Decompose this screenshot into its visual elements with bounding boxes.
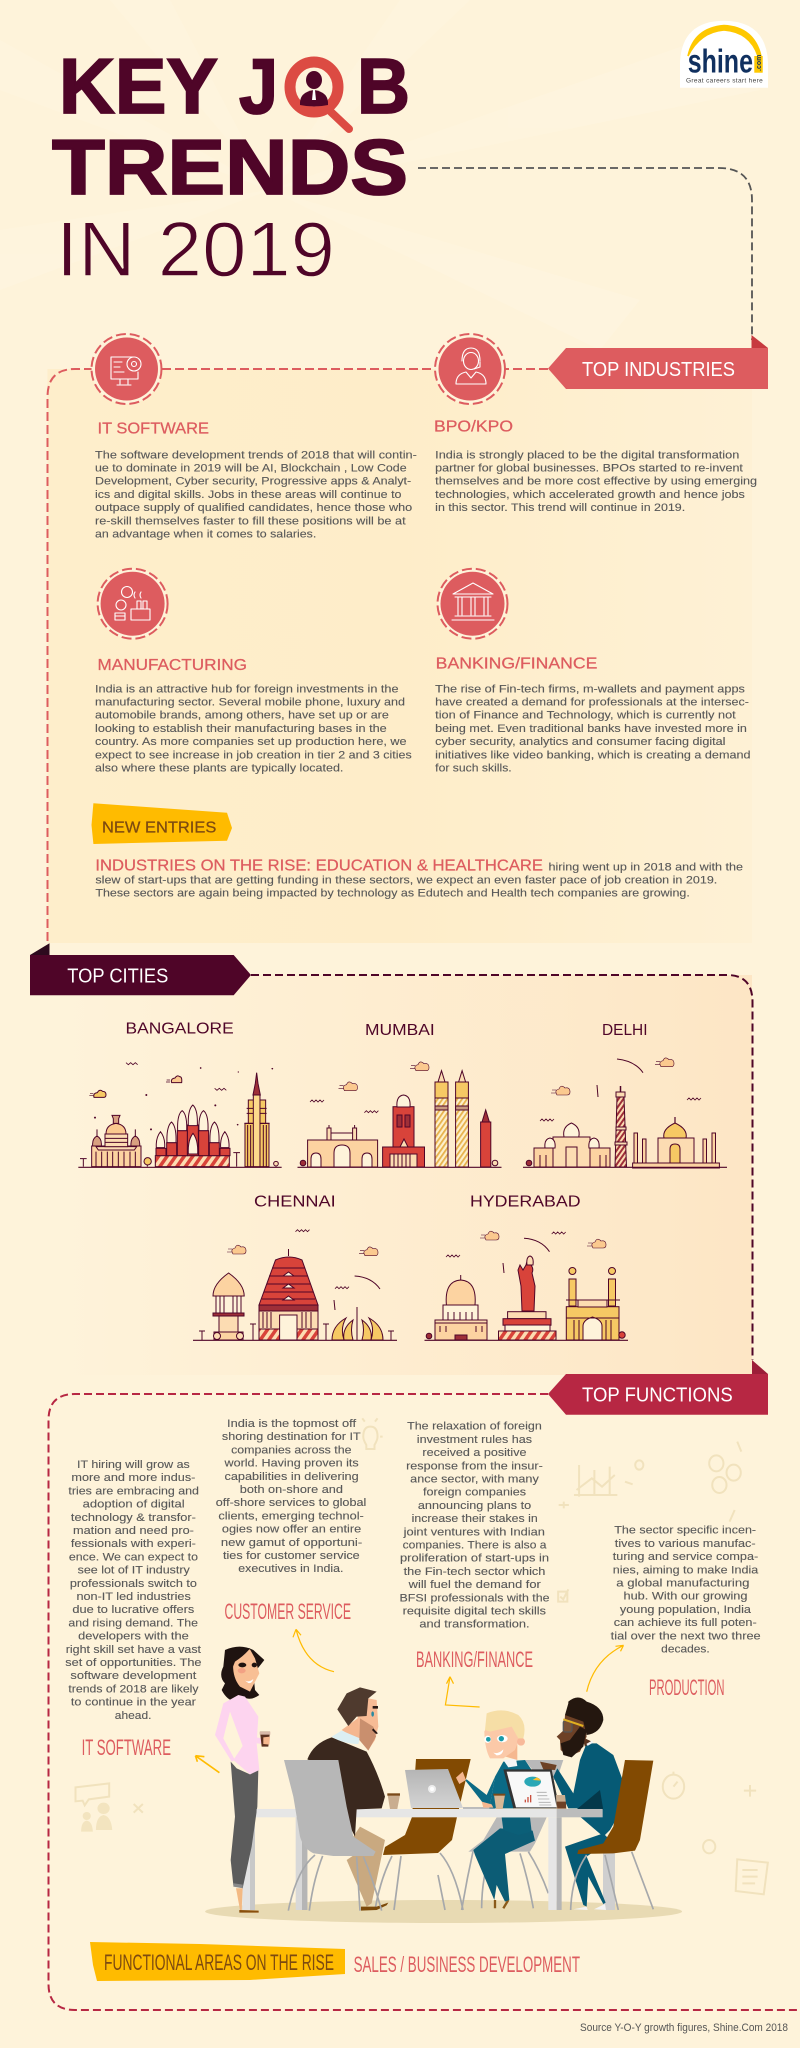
connector: crimson dashed frame (48, 1394, 800, 2010)
city: Hyderabad (424, 1194, 628, 1340)
skyline: Bangalore (78, 1063, 282, 1167)
column: IT software (65, 1459, 219, 1773)
silver laptop (405, 1769, 495, 1809)
text: IT software function: IT hiring will grow as (77, 1459, 190, 1471)
text: IT software body: outpace supply of qualified candidates, hence those who (95, 502, 412, 514)
text: banking function: companies. There is also a (403, 1540, 546, 1552)
text: new entries body: hiring went up in 2018 and with the (548, 861, 743, 873)
chair: grey front (284, 1760, 382, 1911)
text: banking function: and transformation. (419, 1619, 530, 1631)
connector: title to top industries (418, 168, 752, 340)
text: customer service function: both on-shore and (240, 1484, 343, 1496)
logo: shine.com: Great careers start here (686, 78, 763, 85)
text: customer service function: clients, emerging technol- (218, 1510, 364, 1522)
person: man seated (307, 1687, 388, 1911)
icon: banking (438, 569, 508, 639)
text: banking function: foreign companies (423, 1487, 527, 1499)
label: production: PRODUCTION (649, 1675, 724, 1700)
table top (256, 1809, 603, 1910)
city: Mumbai (298, 1022, 502, 1167)
text: IT software function: ence. We can expect to (69, 1551, 198, 1563)
text: banking body: tion of Finance and Technology, which is currently not (435, 710, 736, 722)
label: IT software: IT SOFTWARE (82, 1735, 171, 1760)
text: IT software body: re-skill themselves faster to fill these positions will be at (95, 515, 406, 527)
city: Chennai (193, 1194, 397, 1340)
person: woman standing (215, 1647, 270, 1913)
table left section (257, 1809, 297, 1817)
rear table legs (242, 1810, 615, 1910)
text: IT software body: Development, Cyber security, Progressive apps & Analyt- (95, 476, 412, 488)
block: IT software (95, 420, 417, 540)
text: IT software function: non-IT led industries (76, 1591, 191, 1603)
tag: new entries (92, 803, 232, 844)
text: production function: tives to various manufac- (615, 1538, 756, 1550)
text: new entries body (95, 858, 743, 900)
text: production function: young population, India (620, 1604, 751, 1616)
text: IT software function: software development (70, 1670, 196, 1682)
city: Delhi (523, 1022, 727, 1168)
text: production function: decades. (661, 1644, 710, 1656)
chair: brown rear (375, 1759, 471, 1910)
arrow: to woman (195, 1756, 219, 1773)
block: manufacturing: MANUFACTURING (98, 657, 247, 674)
text: IT software body (95, 449, 417, 540)
text: IT software function: tries are embracing and (68, 1485, 199, 1497)
icon: IT software (92, 334, 162, 404)
text: IT software body: an advantage when it comes to salaries. (95, 528, 316, 540)
chair: grey rear (462, 1760, 563, 1910)
text: banking function: response from the insur- (406, 1460, 543, 1472)
text: IT software function: to continue in the year (71, 1697, 196, 1709)
tag: functional areas on the rise (90, 1942, 345, 1981)
title line: KEY J B: J (239, 42, 278, 130)
city: Hyderabad: HYDERABAD (470, 1194, 581, 1211)
city: Mumbai: MUMBAI (365, 1022, 435, 1039)
text: customer service function: new gamut of opportuni- (221, 1537, 363, 1549)
text: manufacturing body: India is an attractive hub for foreign investments in the (95, 683, 398, 695)
skyline: Chennai (193, 1230, 397, 1340)
text: new entries body: INDUSTRIES ON THE RISE: EDUCATION & HEALTHCARE (95, 858, 543, 875)
text: IT software function: trends of 2018 are likely (68, 1683, 199, 1695)
text: production function: turing and service compa- (613, 1551, 759, 1563)
text: banking body: being met. Even traditional banks have invested more in (435, 723, 747, 735)
text: IT software function: more and more indus- (71, 1472, 196, 1484)
faint background icons (362, 1418, 741, 1602)
person: blonde woman (456, 1710, 535, 1908)
text: banking function (400, 1421, 550, 1631)
text: production function: tial over the next two three (611, 1630, 761, 1642)
text: banking function: will fuel the demand for (408, 1579, 541, 1591)
text: banking function: The relaxation of foreign (407, 1421, 542, 1433)
coffee cup (387, 1793, 400, 1809)
scene: people at a table (205, 1647, 682, 1923)
text: production function: hub. With our growing (624, 1591, 748, 1603)
text: banking body: The rise of Fin-tech firms, m-wallets and payment apps (435, 683, 746, 695)
logo: shine.com (680, 21, 768, 88)
title (52, 42, 410, 293)
skyline: Mumbai (298, 1062, 502, 1167)
block: BPO/KPO (434, 419, 757, 514)
label: banking/finance: BANKING/FINANCE (416, 1647, 533, 1672)
title line: KEY J B (59, 42, 410, 130)
text: IT software function: developers with the (78, 1631, 189, 1643)
banner: top cities (30, 943, 251, 995)
arrow: to production (587, 1645, 624, 1692)
ground shadow (205, 1900, 682, 1923)
text: manufacturing body: looking to establish their manufacturing bases in the (95, 723, 387, 735)
text: manufacturing body: country. As more companies set up production here, we (95, 736, 407, 748)
text: banking function: increase their stakes in (412, 1513, 538, 1525)
text: banking function: received a positive (422, 1447, 526, 1459)
connector: pink dashed frame (48, 369, 548, 943)
text: manufacturing body: manufacturing sector. Several mobile phone, luxury and (95, 696, 405, 708)
text: manufacturing body: also where these plants are typically located. (95, 762, 343, 774)
text: banking function: announcing plans to (418, 1500, 531, 1512)
text: BPO body: technologies, which accelerated growth and hence jobs (435, 489, 746, 501)
text: customer service function: capabilities in delivering (224, 1471, 359, 1483)
text: IT software function: and rising demand. The (68, 1617, 198, 1629)
text: banking body: initiatives like video banking, which is creating a demand (435, 749, 750, 761)
banner: top functions: TOP FUNCTIONS (582, 1384, 733, 1406)
text: IT software function: see lot of IT industry (78, 1565, 190, 1577)
laptop: chart on screen (503, 1769, 559, 1808)
title line: IN 2019: IN 2019 (56, 205, 335, 293)
text: customer service function (216, 1418, 366, 1575)
skyline: Hyderabad (424, 1231, 628, 1340)
text: BPO body: partner for global businesses. BPOs started to re-invent (435, 462, 743, 474)
text: banking function: requisite digital tech skills (403, 1606, 547, 1618)
text: new entries body: These sectors are again being impacted by technology as Edutech and Health tech companies are growing. (95, 888, 690, 900)
text: IT software body: The software development trends of 2018 that will contin- (95, 449, 417, 461)
section: top industries (48, 334, 768, 943)
text: manufacturing body (95, 683, 412, 774)
logo: shine.com: .com (756, 55, 763, 71)
text: banking function: ance sector, with many (410, 1474, 539, 1486)
text: IT software function: fessionals with experi- (71, 1538, 196, 1550)
text: customer service function: India is the topmost off (227, 1418, 357, 1430)
banner: top industries (548, 335, 768, 389)
text: BPO body (435, 449, 757, 514)
text: banking function: the Fin-tech sector which (404, 1566, 545, 1578)
title line: TRENDS: TRENDS (52, 123, 408, 211)
text: new entries body: slew of start-ups that are getting funding in these sectors, we expect an even faster pace of job creation in 2019. (95, 875, 717, 887)
block: banking/finance (435, 655, 750, 774)
column: banking/finance (400, 1421, 550, 1707)
text: customer service function: off-shore services to global (216, 1497, 366, 1509)
text: IT software function: adoption of digital (83, 1499, 185, 1511)
text: IT software function: ahead. (115, 1710, 152, 1722)
block: IT software: IT SOFTWARE (98, 420, 209, 438)
group: blonde person and bearded man (256, 1697, 653, 1910)
tag: functional areas on the rise: FUNCTIONAL AREAS ON THE RISE (104, 1950, 334, 1975)
title line: KEY J B: KEY (59, 42, 218, 130)
text: customer service function: companies across the (231, 1444, 352, 1456)
banner: top functions (548, 1360, 768, 1415)
text: IT software function: set of opportunities. The (65, 1657, 202, 1669)
skyline: Delhi (523, 1058, 727, 1168)
text: sales / business development: SALES / BUSINESS DEVELOPMENT (354, 1952, 580, 1977)
banner: top industries: TOP INDUSTRIES (582, 359, 735, 381)
text: manufacturing body: automobile brands, among others, have set up or are (95, 710, 389, 722)
block: banking/finance: BANKING/FINANCE (436, 655, 597, 672)
text: customer service function: shoring destination for IT (222, 1431, 361, 1443)
text: banking function: investment rules has (417, 1434, 533, 1446)
text: IT software function (65, 1459, 202, 1722)
text: production function: nies, aiming to make India (613, 1564, 758, 1576)
connector: maroon dashed frame (251, 975, 752, 1360)
text: production function: a global manufacturing (616, 1578, 750, 1590)
tag: new entries: NEW ENTRIES (102, 820, 216, 837)
arrow: to banking/finance (445, 1677, 480, 1707)
label: customer service: CUSTOMER SERVICE (224, 1599, 351, 1624)
text: customer service function: ties for customer service (223, 1550, 360, 1562)
block: BPO/KPO: BPO/KPO (434, 419, 513, 436)
group: standing woman and seated man (215, 1647, 400, 1913)
text: BPO body: themselves and be more cost effective by using emerging (435, 476, 757, 488)
text: IT software function: right skill set have a vast (66, 1644, 201, 1656)
person: bearded man (540, 1697, 623, 1910)
text: IT software function: due to lucrative offers (72, 1604, 195, 1616)
text: production function (611, 1525, 761, 1656)
text: manufacturing body: expect to see increase in job creation in tier 2 and 3 cities (95, 749, 412, 761)
block: manufacturing (95, 657, 412, 774)
text: BPO body: in this sector. This trend will continue in 2019. (435, 502, 685, 514)
column: production (587, 1525, 761, 1700)
faint background icons lower (76, 1772, 768, 1894)
icon: BPO headset (435, 334, 505, 404)
city: Chennai: CHENNAI (254, 1194, 336, 1211)
text: IT software function: technology & transfor- (71, 1512, 196, 1524)
text: banking body: cyber security, analytics and consumer facing digital (435, 736, 726, 748)
banner: top cities: TOP CITIES (67, 965, 168, 987)
text: banking function: BFSI professionals with the (400, 1592, 550, 1604)
chair: brown right (571, 1760, 653, 1910)
text: banking function: joint ventures with Indian (402, 1526, 545, 1538)
arrow: to customer service (293, 1629, 334, 1672)
text: IT software function: professionals switch to (70, 1578, 197, 1590)
text: IT software body: ics and digital skills. Jobs in these areas will continue to (95, 489, 402, 501)
text: production function: The sector specific incen- (614, 1525, 757, 1537)
icon: manufacturing (98, 569, 168, 639)
text: banking body: for such skills. (435, 762, 512, 774)
text: production function: can achieve its full poten- (614, 1617, 757, 1629)
city: Bangalore (78, 1020, 282, 1167)
text: customer service function: world. Having proven its (223, 1458, 359, 1470)
section: top cities (30, 943, 752, 1360)
icon: magnifier with person (290, 62, 349, 129)
title line: KEY J B: B (357, 42, 410, 130)
text: banking function: proliferation of start-ups in (400, 1553, 549, 1565)
city: Delhi: DELHI (602, 1022, 648, 1039)
text: banking body (435, 683, 750, 774)
text: BPO body: India is strongly placed to be the digital transformation (435, 449, 739, 461)
text: banking body: have created a demand for professionals at the intersec- (435, 696, 749, 708)
city: Bangalore: BANGALORE (126, 1020, 234, 1037)
coffee cups (493, 1794, 567, 1809)
text: IT software body: ue to dominate in 2019 will be AI, Blockchain , Low Code (95, 462, 407, 474)
text: customer service function: ogies now offer an entire (222, 1524, 361, 1536)
text: customer service function: executives in India. (238, 1563, 343, 1575)
text: IT software function: mation and need pro- (73, 1525, 194, 1537)
column: customer service (216, 1418, 366, 1672)
logo: shine.com: shine (688, 43, 753, 80)
section: top functions (48, 1360, 800, 2010)
